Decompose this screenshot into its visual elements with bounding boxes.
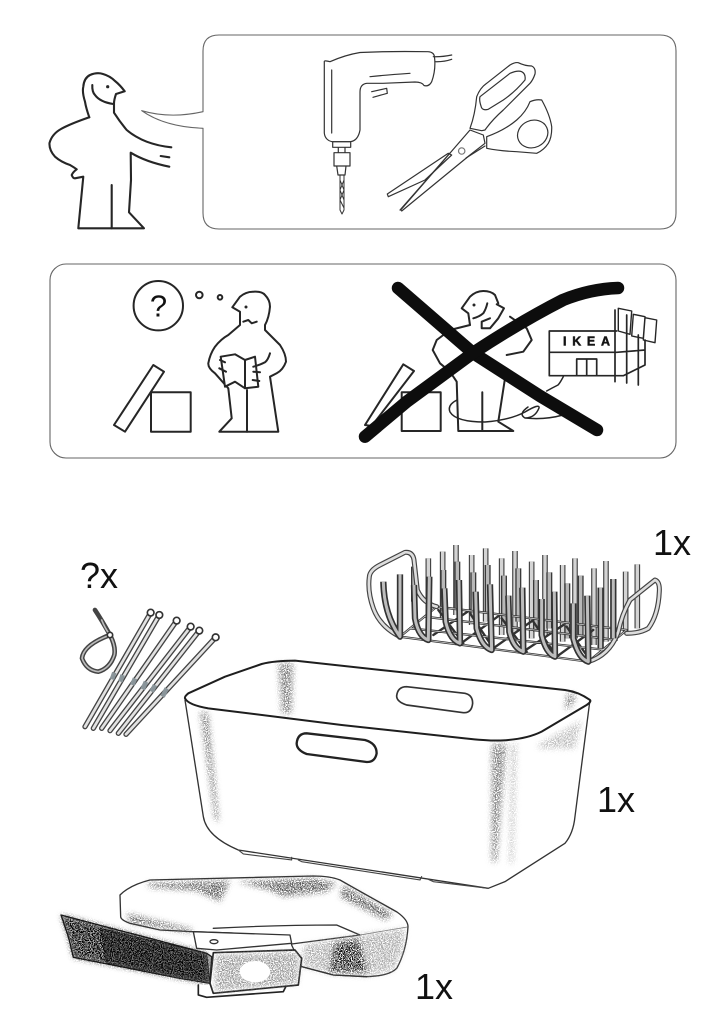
icon: scissors — [387, 63, 552, 211]
label: rack count: 1x — [653, 522, 691, 563]
icon: velcro strap — [61, 876, 408, 997]
icon: drill — [324, 51, 452, 214]
icon: crossed out box — [365, 364, 441, 431]
icon: cable ties — [82, 609, 219, 734]
panel: tools needed — [142, 35, 676, 229]
icon: open box — [114, 365, 191, 432]
icon: question bubble: ? — [150, 288, 167, 324]
panel: read instructions, do not call — [50, 264, 676, 458]
icon: figure reading manual — [208, 292, 286, 432]
icon: IKEA store: IKEA — [563, 335, 610, 349]
icon: storage basket — [185, 661, 590, 888]
icon: figure on phone — [433, 291, 563, 431]
label: basket count: 1x — [597, 779, 635, 820]
label: strap count: 1x — [415, 966, 453, 1007]
icon: question bubble — [134, 281, 222, 330]
icon: ikea figure pointing — [49, 73, 171, 228]
icon: black cross — [365, 288, 618, 437]
label: cable tie count: ?x — [80, 555, 118, 596]
icon: wire rack — [369, 545, 659, 662]
icon: IKEA store — [549, 308, 657, 385]
